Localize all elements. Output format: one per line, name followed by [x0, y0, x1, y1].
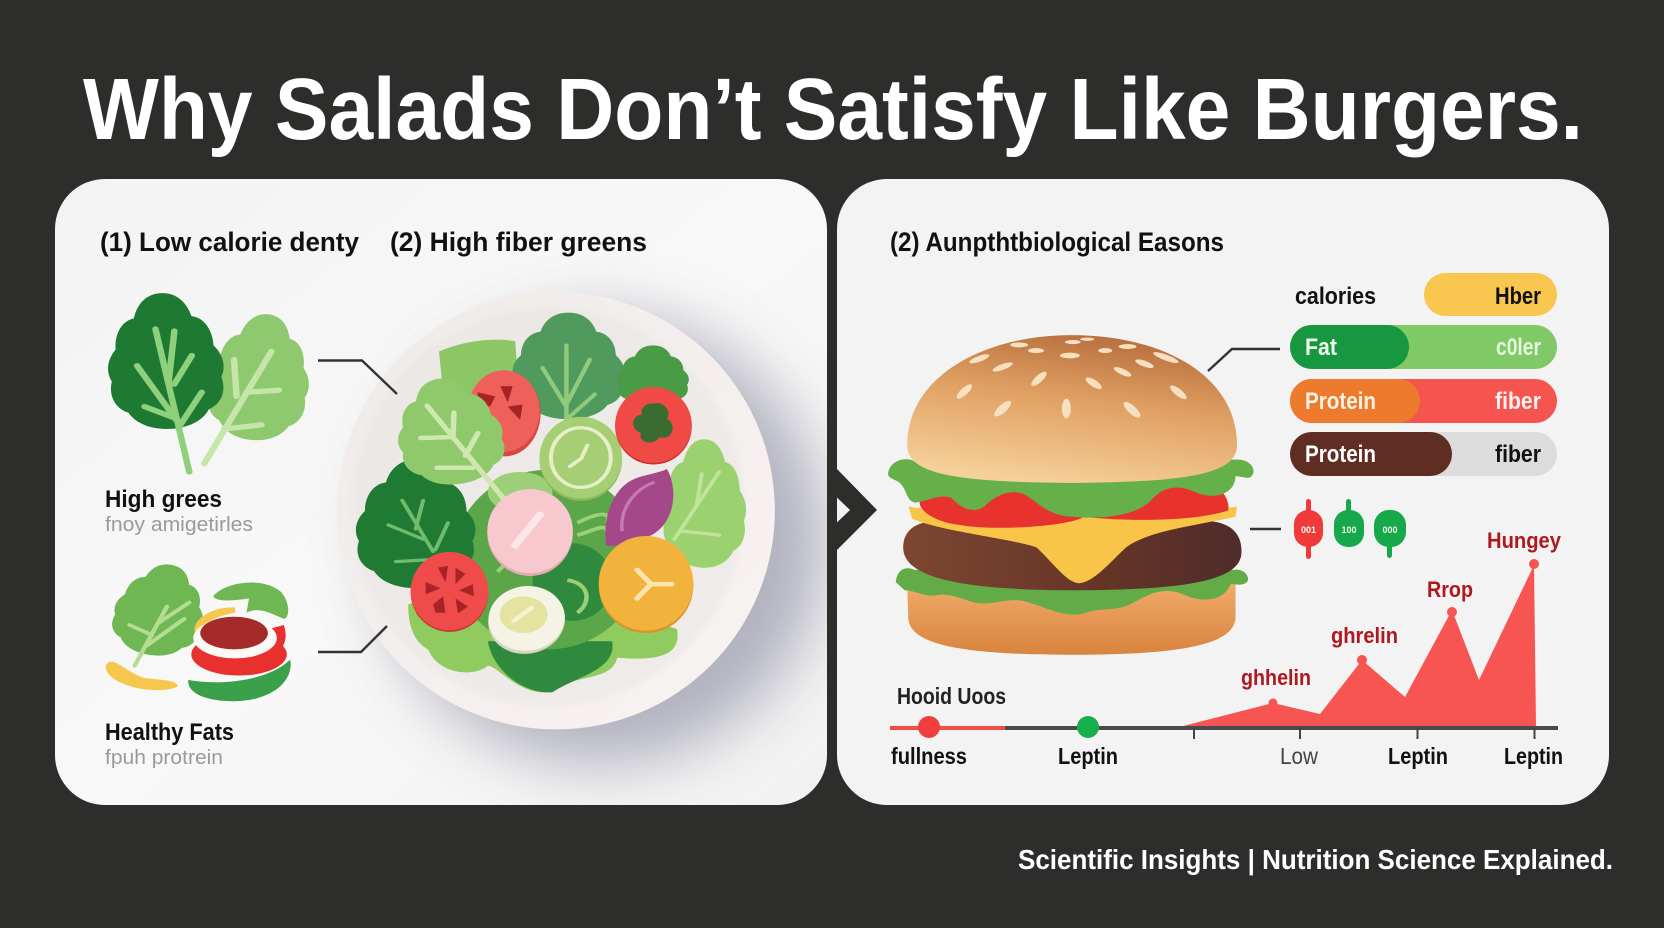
icons: hormone capsules [1294, 499, 1406, 559]
legend: protein bar: fiber [1495, 388, 1541, 415]
legend: protein bar [1290, 379, 1557, 423]
timeline axis: Leptin [1504, 743, 1563, 769]
legend: fat bar: c0ler [1496, 334, 1541, 361]
timeline axis: Hooid Uoos [897, 683, 1006, 709]
chart: ghrelin over time: Hungey [1487, 528, 1562, 553]
icons: hormone capsules: 000 [1382, 525, 1398, 535]
heading: high fiber greens: (2) High fiber greens [390, 227, 647, 257]
legend: fat bar [1290, 325, 1557, 369]
legend: protein bar dark: fiber [1495, 441, 1541, 468]
timeline axis: Low [1280, 743, 1318, 769]
plate shadow [375, 315, 825, 765]
sublabel: greens: fnoy amigetirles [105, 514, 253, 536]
burger illustration [888, 335, 1254, 655]
legend: calories row: calories [1295, 283, 1376, 310]
chart: ghrelin over time: ghhelin [1241, 665, 1311, 690]
panel: salad [55, 179, 827, 805]
panel: burger [837, 179, 1609, 805]
timeline axis [890, 683, 1563, 769]
legend: calories row [1295, 273, 1557, 316]
icons: hormone capsules: 100 [1341, 525, 1357, 535]
chart: ghrelin over time [1183, 528, 1562, 726]
legend: protein bar dark: Protein [1305, 441, 1376, 468]
leader line: greens [318, 360, 397, 394]
timeline axis: Leptin [1058, 743, 1118, 769]
salad bowl [337, 292, 775, 729]
icons: hormone capsules: 001 [1301, 525, 1316, 535]
legend: protein bar dark [1290, 432, 1557, 476]
legend: fat bar: Fat [1305, 334, 1337, 361]
arrow: chevron between panels [827, 469, 877, 550]
chart: ghrelin over time: Rrop [1427, 577, 1473, 602]
heading: physiological reasons: (2) Aunpthtbiological Easons [890, 227, 1224, 257]
icon: leaves [103, 291, 317, 472]
leader line: bun [1208, 349, 1280, 371]
icon: healthy fats [104, 557, 291, 701]
timeline axis: fullness [891, 743, 967, 769]
leader line: fats [318, 626, 387, 652]
sublabel: protein: fpuh protrein [105, 747, 223, 769]
legend: protein bar: Protein [1305, 388, 1376, 415]
title: Why Salads Don’t Satisfy Like Burgers. [83, 61, 1583, 158]
chart: ghrelin over time: ghrelin [1331, 623, 1398, 648]
heading: low calorie density: (1) Low calorie denty [100, 227, 359, 257]
legend: calories row: Hber [1495, 283, 1541, 310]
leader line: hormones [1250, 528, 1281, 530]
label: healthy fats: Healthy Fats [105, 719, 234, 746]
timeline axis: Leptin [1388, 743, 1448, 769]
footer: Scientific Insights | Nutrition Science Explained. [1018, 844, 1613, 875]
label: high greens: High grees [105, 486, 222, 513]
